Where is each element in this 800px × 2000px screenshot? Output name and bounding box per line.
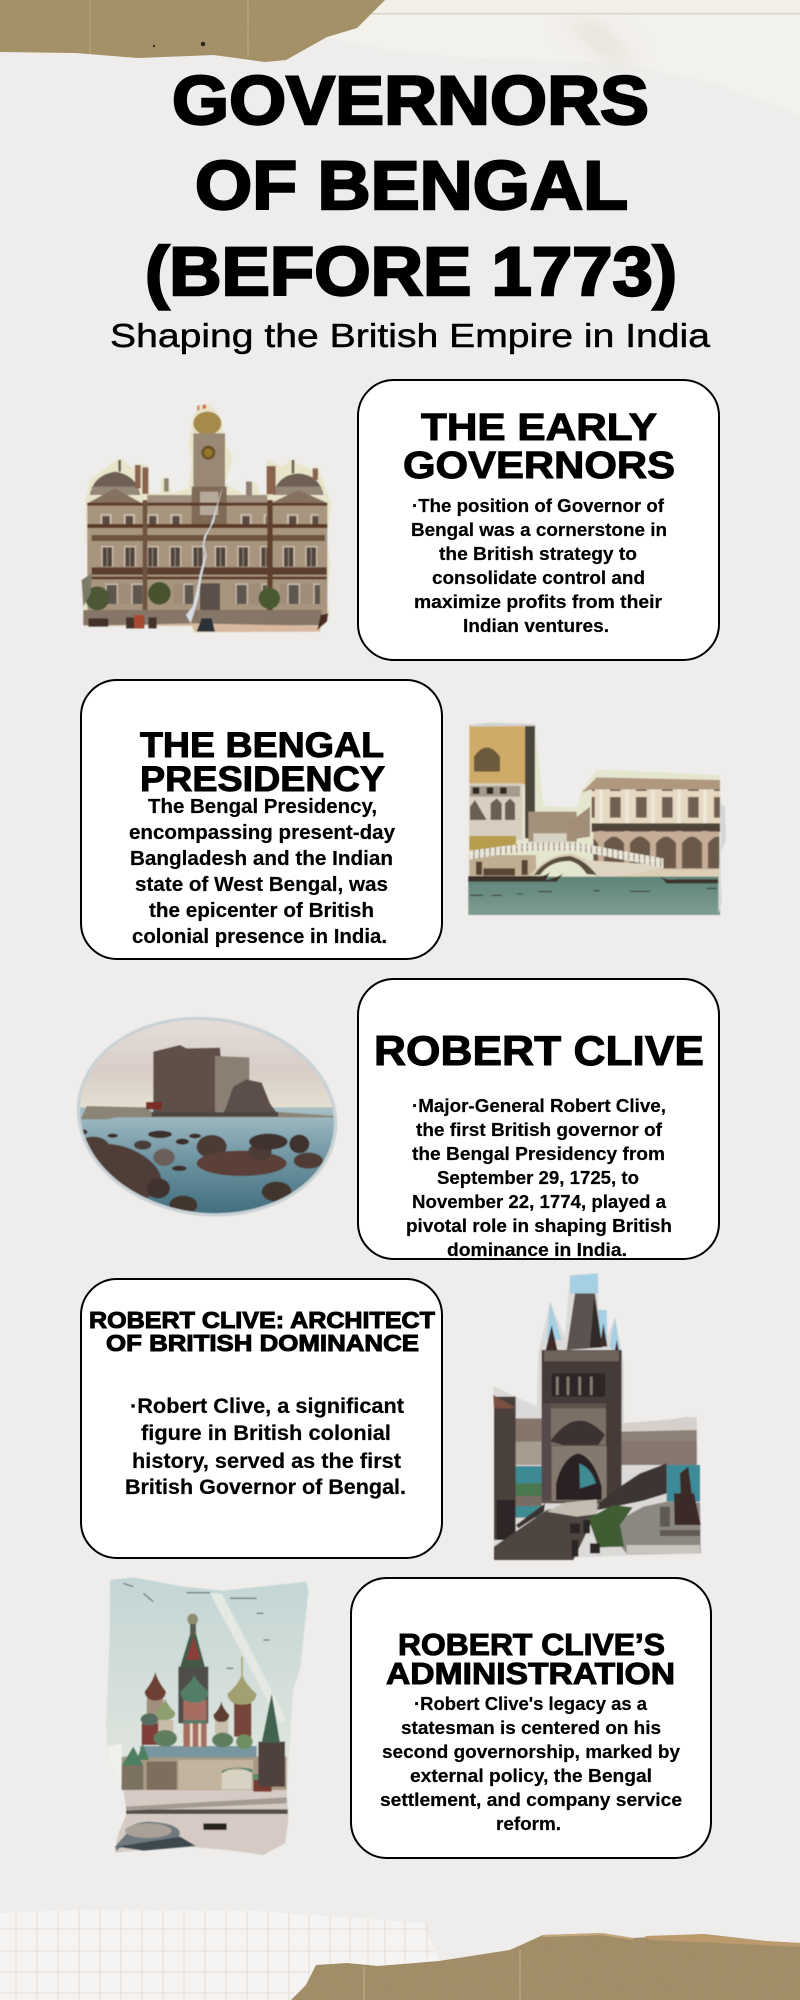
body text: colonial presence in India. <box>132 926 387 948</box>
heading: PRESIDENCY <box>140 759 385 799</box>
heading: ROBERT CLIVE’S <box>398 1628 665 1662</box>
heading <box>403 407 675 487</box>
card outline <box>358 380 719 660</box>
torn kraft paper bottom right <box>291 1933 800 2000</box>
body text: the first British governor of <box>416 1119 663 1140</box>
body text: dominance in India. <box>447 1239 627 1260</box>
panel: robert clive <box>358 979 719 1260</box>
torn kraft paper top left <box>0 0 385 62</box>
panel: the bengal presidency <box>81 680 442 959</box>
body text <box>380 1693 682 1834</box>
body text: reform. <box>496 1813 561 1834</box>
panel: robert clive architect of british dominance <box>81 1279 442 1558</box>
body text: settlement, and company service <box>380 1789 682 1810</box>
body text: consolidate control and <box>432 567 645 588</box>
image: prague bridge tower <box>493 1273 701 1560</box>
body text <box>406 1095 672 1260</box>
body text: state of West Bengal, was <box>135 874 388 896</box>
body text: British Governor of Bengal. <box>125 1476 406 1499</box>
body text: the British strategy to <box>439 543 637 564</box>
body text <box>129 796 396 948</box>
panel: robert clive's administration <box>351 1578 711 1858</box>
heading <box>140 725 385 799</box>
body text: ·Major-General Robert Clive, <box>412 1095 666 1116</box>
card outline <box>358 979 719 1259</box>
body text <box>125 1395 406 1499</box>
title: OF BENGAL <box>195 147 628 224</box>
body text: the epicenter of British <box>149 900 374 922</box>
body text: history, served as the first <box>132 1450 401 1473</box>
body text: maximize profits from their <box>414 591 662 612</box>
heading: ADMINISTRATION <box>386 1657 675 1691</box>
title <box>145 62 677 310</box>
body text: November 22, 1774, played a <box>412 1191 667 1212</box>
image: st basil's cathedral on torn postcard <box>106 1577 308 1855</box>
heading <box>386 1628 675 1691</box>
body text <box>411 495 667 636</box>
body text: external policy, the Bengal <box>410 1765 652 1786</box>
title: (BEFORE 1773) <box>145 233 677 310</box>
body text: statesman is centered on his <box>401 1717 661 1738</box>
card outline <box>81 680 442 959</box>
grid paper bottom left <box>0 1910 439 2000</box>
body text: The Bengal Presidency, <box>148 796 377 818</box>
body text: ·Robert Clive, a significant <box>130 1395 404 1418</box>
image: venice bridge and palace <box>468 723 726 915</box>
body text: Bangladesh and the Indian <box>130 848 393 870</box>
image: island castle on rocky sea <box>76 1016 338 1217</box>
panel: the early governors <box>358 380 719 660</box>
subtitle: Shaping the British Empire in India <box>110 317 711 354</box>
heading: GOVERNORS <box>403 445 675 487</box>
body text: September 29, 1725, to <box>437 1167 639 1188</box>
body text: ·Robert Clive's legacy as a <box>414 1693 648 1714</box>
heading: OF BRITISH DOMINANCE <box>106 1330 419 1356</box>
heading: THE EARLY <box>421 407 657 449</box>
heading: ROBERT CLIVE: ARCHITECT <box>89 1307 436 1333</box>
body text: encompassing present-day <box>129 822 396 844</box>
body text: pivotal role in shaping British <box>406 1215 672 1236</box>
heading <box>89 1307 436 1356</box>
body text: Indian ventures. <box>463 615 609 636</box>
body text: ·The position of Governor of <box>412 495 665 516</box>
card outline <box>351 1578 711 1858</box>
body text: figure in British colonial <box>141 1422 391 1445</box>
body text: second governorship, marked by <box>382 1741 681 1762</box>
heading: THE BENGAL <box>140 725 384 765</box>
body text: the Bengal Presidency from <box>412 1143 665 1164</box>
title: GOVERNORS <box>172 62 649 139</box>
torn white paper top right <box>327 0 800 115</box>
card outline <box>81 1279 442 1558</box>
image: town hall building <box>82 404 332 633</box>
heading: ROBERT CLIVE <box>374 1027 704 1074</box>
body text: Bengal was a cornerstone in <box>411 519 667 540</box>
